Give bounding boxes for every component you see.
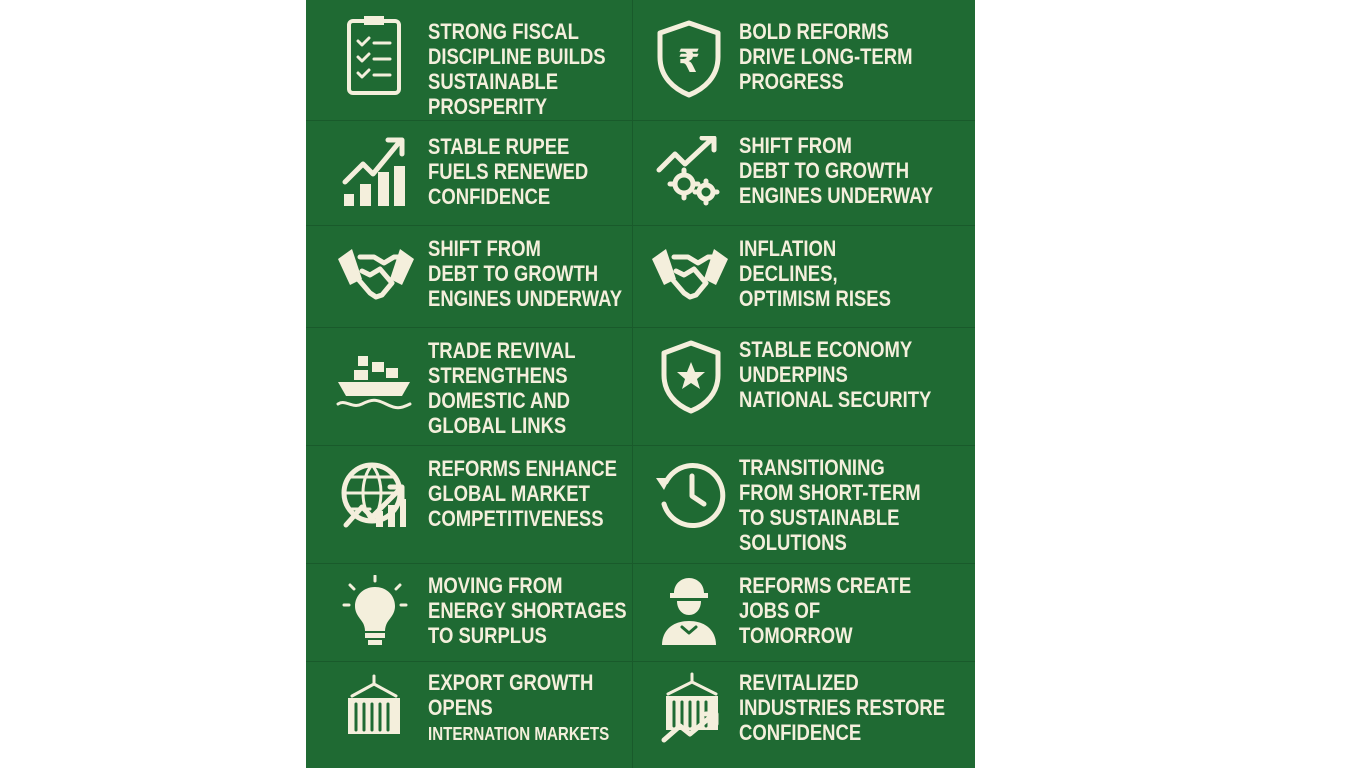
text: transitioning [739, 455, 921, 555]
text: reforms create jobs: TOMORROW [739, 623, 853, 648]
icon: handshake 2 [652, 249, 728, 300]
text: inflation: INFLATION [739, 236, 836, 261]
text: bold reforms: BOLD REFORMS [739, 19, 889, 44]
icon: history clock [656, 463, 726, 528]
icon: shield rupee [658, 20, 720, 98]
text: shift from debt: DEBT TO GROWTH [739, 158, 909, 183]
icon: handshake [338, 249, 414, 300]
icon: clipboard checklist [347, 16, 401, 95]
text: shift from debt: ENGINES UNDERWAY [739, 183, 933, 208]
text: moving from energy: TO SURPLUS [428, 623, 547, 648]
text: bold reforms: DRIVE LONG-TERM [739, 44, 913, 69]
text: stable economy: NATIONAL SECURITY [739, 387, 931, 412]
text: inflation [739, 236, 891, 311]
text: moving from energy: ENERGY SHORTAGES [428, 598, 627, 623]
text: strong fiscal: DISCIPLINE BUILDS [428, 44, 606, 69]
text: revitalized industries: INDUSTRIES RESTORE [739, 695, 945, 720]
icon: gears arrow [656, 136, 720, 206]
text: shift from debt 2 [428, 236, 622, 311]
text: shift from debt [739, 133, 933, 208]
text: transitioning: TO SUSTAINABLE [739, 505, 900, 530]
text: shift from debt 2: DEBT TO GROWTH [428, 261, 598, 286]
text: reforms enhance: GLOBAL MARKET [428, 481, 590, 506]
text: export growth: INTERNATION MARKETS [428, 724, 609, 744]
text: revitalized industries: REVITALIZED [739, 670, 859, 695]
text: reforms create jobs: REFORMS CREATE [739, 573, 911, 598]
icon: globe chart [342, 462, 406, 528]
text: export growth: OPENS [428, 695, 493, 720]
text: bold reforms [739, 19, 913, 94]
text: shift from debt 2: ENGINES UNDERWAY [428, 286, 622, 311]
text: moving from energy [428, 573, 627, 648]
text: moving from energy: MOVING FROM [428, 573, 562, 598]
text: reforms create jobs [739, 573, 911, 648]
icon: worker [662, 578, 716, 645]
panel: green grid [306, 0, 975, 768]
icon: shield star [662, 340, 720, 414]
text: reforms enhance: REFORMS ENHANCE [428, 456, 617, 481]
icon: container chart [662, 672, 718, 742]
text: shift from debt: SHIFT FROM [739, 133, 852, 158]
text: trade revival [428, 338, 576, 438]
text: stable rupee: STABLE RUPEE [428, 134, 569, 159]
text: transitioning: FROM SHORT-TERM [739, 480, 921, 505]
text: stable rupee: FUELS RENEWED [428, 159, 588, 184]
text: trade revival: TRADE REVIVAL [428, 338, 576, 363]
text: stable economy: STABLE ECONOMY [739, 337, 912, 362]
text: trade revival: GLOBAL LINKS [428, 413, 566, 438]
text: transitioning: SOLUTIONS [739, 530, 847, 555]
icon: cargo ship [336, 356, 412, 410]
text: transitioning: TRANSITIONING [739, 455, 885, 480]
text: export growth: EXPORT GROWTH [428, 670, 593, 695]
text: stable rupee [428, 134, 588, 209]
text: strong fiscal [428, 19, 606, 119]
text: reforms create jobs: JOBS OF [739, 598, 820, 623]
text: revitalized industries: CONFIDENCE [739, 720, 861, 745]
text: trade revival: STRENGTHENS [428, 363, 568, 388]
icon: container crane [348, 674, 400, 734]
text: stable rupee: CONFIDENCE [428, 184, 550, 209]
text: shift from debt 2: SHIFT FROM [428, 236, 541, 261]
icon: shield rupee: ₹ [678, 42, 700, 80]
text: reforms enhance: COMPETITIVENESS [428, 506, 604, 531]
text: strong fiscal: PROSPERITY [428, 94, 547, 119]
text: strong fiscal: SUSTAINABLE [428, 69, 558, 94]
text: trade revival: DOMESTIC AND [428, 388, 570, 413]
text: strong fiscal: STRONG FISCAL [428, 19, 579, 44]
text: reforms enhance [428, 456, 617, 531]
text: inflation: OPTIMISM RISES [739, 286, 891, 311]
text: revitalized industries [739, 670, 945, 745]
text: inflation: DECLINES, [739, 261, 838, 286]
text: stable economy: UNDERPINS [739, 362, 848, 387]
text: bold reforms: PROGRESS [739, 69, 844, 94]
icon: bar chart arrow [342, 138, 405, 206]
text: export growth [428, 670, 609, 744]
text: stable economy [739, 337, 931, 412]
icon: light bulb [342, 575, 408, 645]
